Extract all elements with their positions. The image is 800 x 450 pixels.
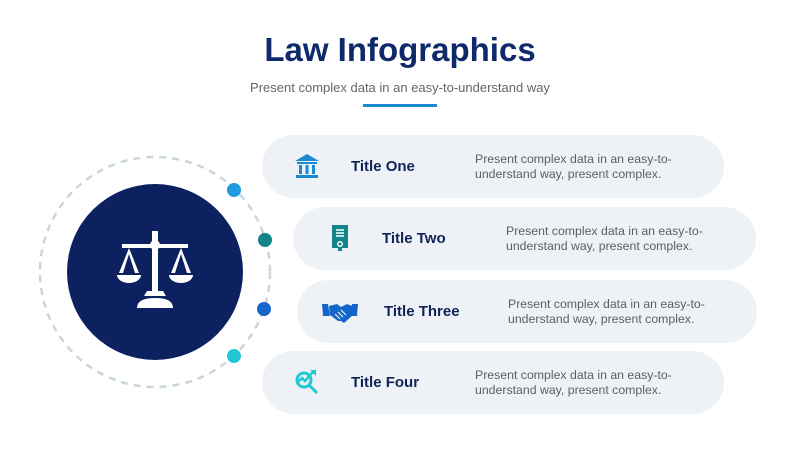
accent underline	[363, 104, 437, 107]
icon: courthouse	[295, 154, 319, 178]
panel: title three: Present complex data in an easy-to-understand way, present complex.	[508, 297, 705, 326]
panel: title one: Present complex data in an easy-to-understand way, present complex.	[475, 152, 672, 181]
title: Law Infographics	[264, 31, 536, 68]
panel: title one	[262, 135, 724, 198]
main circle	[67, 184, 243, 360]
icon: handshake	[322, 304, 358, 323]
circle diagram	[38, 156, 272, 388]
panel: title two	[293, 207, 756, 270]
panel: title two: Title Two	[382, 230, 446, 247]
subtitle: Present complex data in an easy-to-understand way	[250, 80, 550, 95]
panel: title four: Title Four	[351, 374, 419, 391]
panel: title two: Present complex data in an easy-to-understand way, present complex.	[506, 224, 703, 253]
panel: title three: Title Three	[384, 303, 460, 320]
icon: scales of justice	[117, 231, 193, 308]
dots	[227, 183, 241, 197]
panel: title one: Title One	[351, 158, 415, 175]
icon: certificate	[332, 225, 348, 251]
panel: title three	[297, 280, 757, 343]
icon: magnifier chart	[296, 370, 318, 394]
panel: title four	[262, 351, 724, 414]
panel: title four: Present complex data in an easy-to-understand way, present complex.	[475, 368, 672, 397]
